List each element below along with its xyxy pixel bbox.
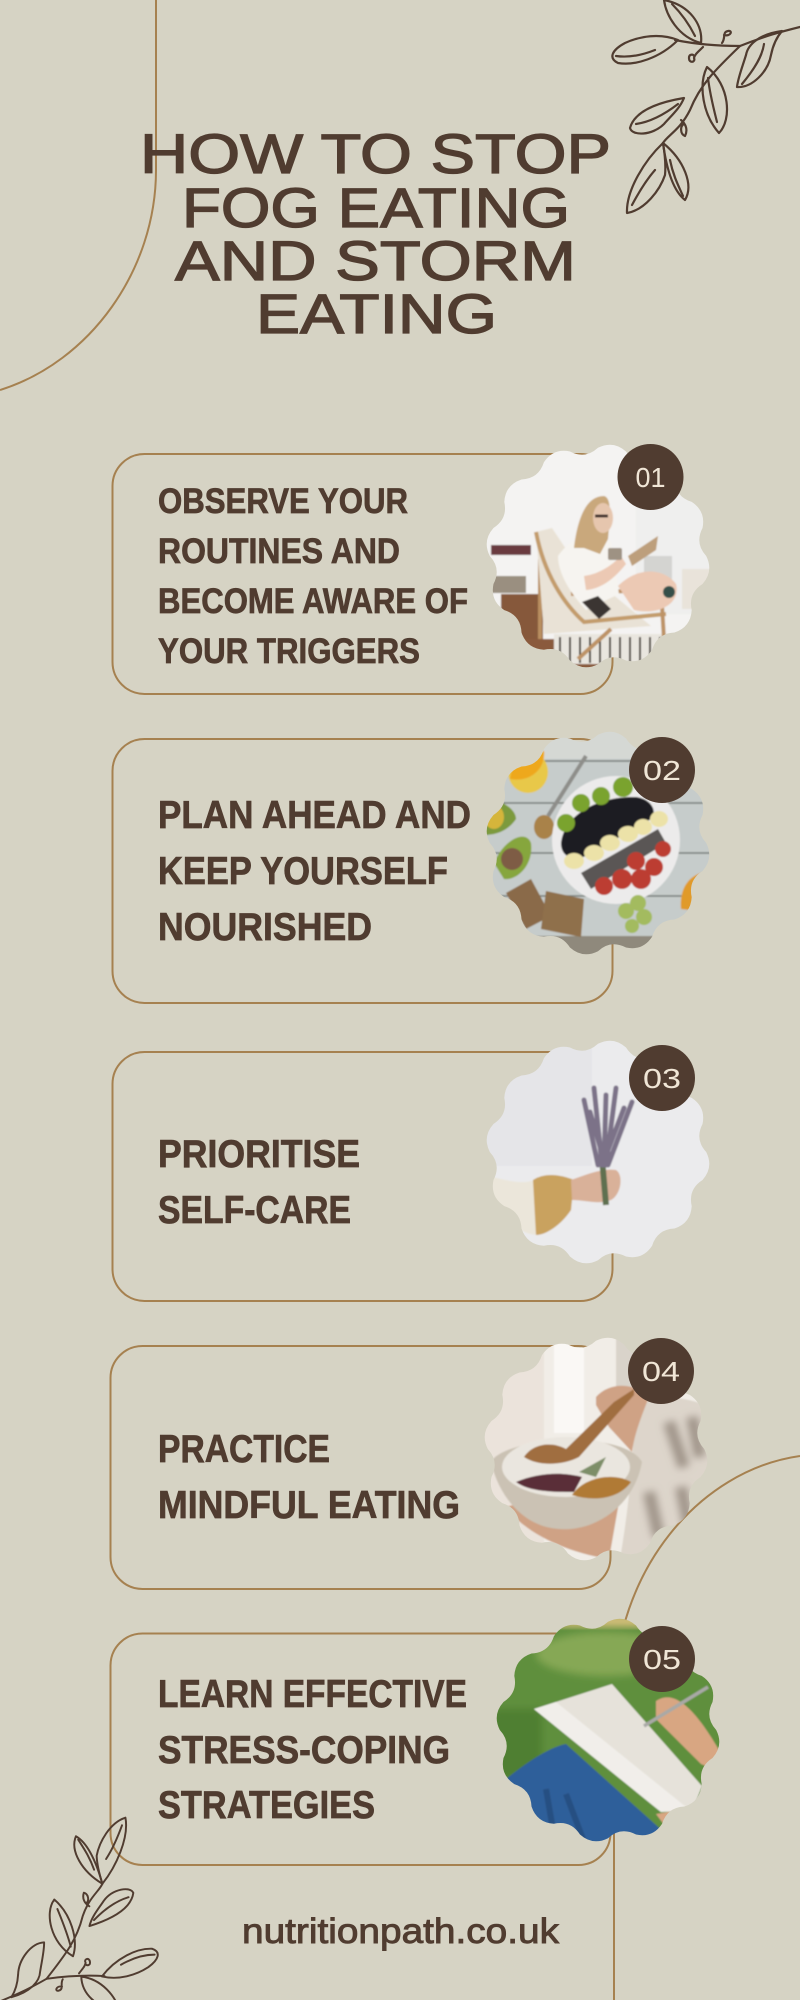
step 1 text: BECOME AWARE OF	[158, 582, 468, 621]
badge 04: 04	[642, 1356, 680, 1387]
step 2 text: PLAN AHEAD AND	[158, 794, 471, 837]
card outline 1	[112, 454, 612, 694]
panel: step 5	[110, 1615, 724, 1865]
panel: step 3	[112, 1036, 714, 1301]
icon: leafy branch top right	[612, 0, 800, 213]
step 5 text	[158, 1673, 467, 1827]
photo: bowl of porridge with spoon	[480, 1333, 712, 1565]
badge 01	[618, 444, 684, 510]
badge 03	[629, 1045, 695, 1111]
step 3 text	[158, 1133, 360, 1232]
step 5 text: LEARN EFFECTIVE	[158, 1673, 467, 1716]
title: EATING	[256, 282, 497, 345]
step 5 text: STRESS-COPING	[158, 1729, 450, 1772]
step 3 text: PRIORITISE	[158, 1133, 360, 1176]
step 1 text: OBSERVE YOUR	[158, 482, 408, 521]
step 4 text	[158, 1428, 460, 1527]
card outline 4	[110, 1346, 610, 1589]
card outline 3	[112, 1052, 612, 1301]
footer website: nutritionpath.co.uk	[242, 1912, 560, 1951]
photo: hand holding lavender	[482, 1036, 714, 1268]
badge 05	[629, 1626, 695, 1692]
badge 03: 03	[643, 1063, 681, 1094]
badge 04	[628, 1338, 694, 1404]
panel: step 4	[110, 1333, 712, 1589]
badge 02: 02	[643, 755, 681, 786]
step 5 text: STRATEGIES	[158, 1784, 375, 1827]
icon: leafy branch bottom left	[0, 1816, 165, 2000]
panel: step 2	[112, 727, 714, 1003]
title: AND STORM	[175, 229, 576, 292]
title	[140, 122, 611, 345]
step 2 text: KEEP YOURSELF	[158, 850, 448, 893]
step 2 text: NOURISHED	[158, 906, 372, 949]
badge 05: 05	[643, 1644, 681, 1675]
photo: writing in notebook on grass	[492, 1615, 724, 1847]
step 2 text	[158, 794, 471, 949]
card outline 5	[110, 1634, 610, 1865]
step 1 text	[158, 482, 468, 671]
badge 01: 01	[636, 462, 666, 493]
title: HOW TO STOP	[140, 122, 611, 185]
photo: healthy breakfast bowl	[482, 727, 714, 959]
title: FOG EATING	[182, 176, 570, 239]
badge 02	[629, 737, 695, 803]
step 3 text: SELF-CARE	[158, 1189, 351, 1232]
step 1 text: ROUTINES AND	[158, 532, 400, 571]
photo: woman reading in chair	[482, 440, 714, 672]
step 4 text: MINDFUL EATING	[158, 1484, 460, 1527]
step 1 text: YOUR TRIGGERS	[158, 632, 420, 671]
panel: step 1	[112, 440, 714, 694]
card outline 2	[112, 739, 612, 1003]
step 4 text: PRACTICE	[158, 1428, 330, 1471]
